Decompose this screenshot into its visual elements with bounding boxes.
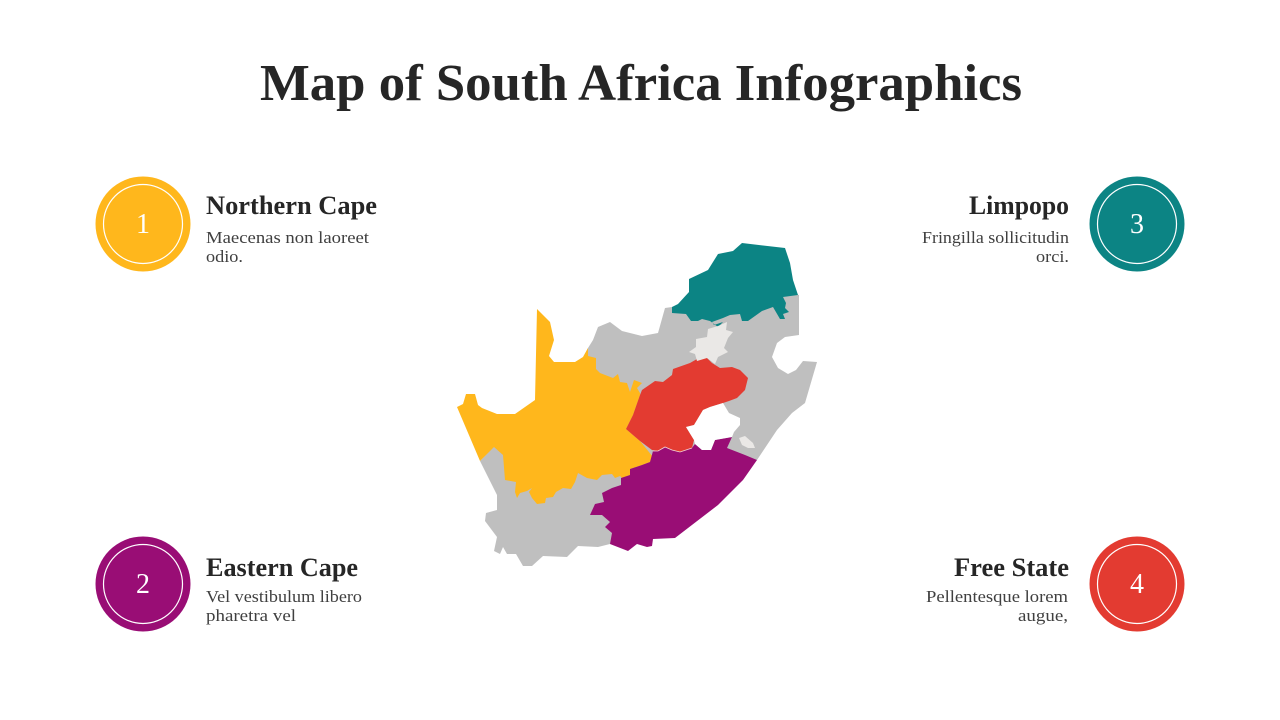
text: Eastern Cape description: pharetra vel [206, 606, 296, 625]
text: Free State description [926, 587, 1068, 625]
icon: number badge 1: 1 [136, 209, 150, 240]
icon: number badge 4: 4 [1130, 569, 1144, 600]
map of South Africa [457, 243, 817, 566]
text: Free State description: Pellentesque lorem [926, 587, 1068, 606]
heading: Northern Cape: Northern Cape [206, 191, 377, 220]
icon: number badge 3: 3 [1130, 209, 1144, 240]
title: Map of South Africa Infographics [260, 55, 1022, 112]
text: Free State description: augue, [1018, 606, 1068, 625]
region: Free State (red) [626, 358, 748, 452]
text: Limpopo description: orci. [1036, 247, 1069, 266]
text: Northern Cape description: odio. [206, 247, 243, 266]
region: Gauteng (light) [689, 322, 733, 364]
item 1: Northern Cape [96, 176, 377, 272]
text: Limpopo description: Fringilla sollicitudin [922, 228, 1069, 247]
region: small light patch [739, 436, 755, 448]
item 4: Free State [926, 536, 1184, 632]
icon: number badge 2: 2 [136, 569, 150, 600]
region: Northern Cape (yellow) [457, 309, 653, 504]
heading: Limpopo: Limpopo [969, 191, 1069, 220]
region: Eastern Cape (purple) [590, 437, 757, 551]
text: Northern Cape description [206, 228, 369, 266]
icon: number badge 3 [1090, 176, 1184, 272]
item 3: Limpopo [922, 176, 1184, 272]
region: grey provinces base [480, 290, 817, 566]
heading: Eastern Cape: Eastern Cape [206, 553, 358, 582]
icon: number badge 4 [1090, 536, 1184, 632]
text: Eastern Cape description: Vel vestibulum libero [206, 587, 362, 606]
text: Northern Cape description: Maecenas non laoreet [206, 228, 369, 247]
heading: Free State: Free State [954, 553, 1069, 582]
item 2: Eastern Cape [96, 536, 362, 632]
text: Eastern Cape description [206, 587, 362, 625]
icon: number badge 2 [96, 536, 190, 632]
text: Limpopo description [922, 228, 1069, 266]
icon: number badge 1 [96, 176, 190, 272]
region: Lesotho gap [686, 403, 740, 450]
region: Limpopo (teal) [672, 243, 798, 327]
